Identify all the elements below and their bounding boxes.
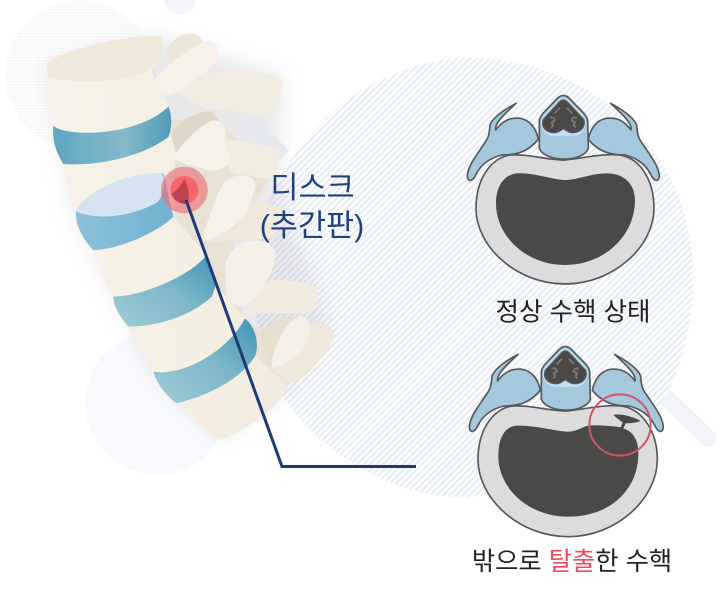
spinal canal: [539, 95, 588, 159]
target inner ring: [170, 176, 198, 204]
vertebra 1 top face: [47, 36, 163, 81]
spine shadow: [47, 37, 330, 440]
vertebral bodies: [47, 36, 288, 440]
background: hatched circle: [254, 58, 693, 497]
process A transverse: [177, 72, 282, 114]
label: disc: [260, 171, 364, 243]
herniated nucleus: [498, 415, 641, 517]
disc 2 top face: [76, 173, 164, 216]
right wing: [588, 103, 659, 180]
right wing: [592, 354, 663, 431]
process E back: [260, 317, 307, 367]
diagram: normal nucleus: [467, 95, 659, 284]
background: diagonal band: [645, 377, 708, 438]
herniation wedge: [172, 178, 189, 204]
caption: normal: 정상 수핵 상태: [496, 298, 650, 326]
process B transverse: [223, 138, 280, 180]
disc 4: [153, 318, 257, 403]
process D facet: [225, 241, 276, 306]
diagram: herniated nucleus: [469, 346, 663, 537]
disc ring: [478, 406, 657, 537]
red highlight circle: [589, 394, 651, 456]
process underlayer: [170, 117, 297, 387]
process A facet: [152, 41, 218, 95]
spinal canal: [541, 346, 590, 410]
illustration: spine: [47, 33, 333, 440]
left wing: [467, 103, 538, 180]
process C transverse: [207, 202, 287, 242]
process E right: [270, 322, 333, 383]
label line 2: (추간판): [260, 209, 364, 243]
label line 1: 디스크: [270, 171, 355, 205]
band behind spine: [243, 117, 283, 157]
background: dotted circle: [5, 0, 155, 150]
background: top small circle: [164, 0, 196, 15]
process D transverse: [243, 280, 318, 313]
process C facet: [203, 175, 255, 242]
target marker: [161, 167, 208, 213]
disc 2 side: [76, 173, 173, 250]
leader line: [186, 200, 416, 466]
nucleus: [496, 173, 635, 265]
disc 3: [113, 255, 216, 327]
target outer ring: [161, 167, 208, 213]
left wing: [469, 354, 540, 431]
caption: herniated: 밖으로 탈출한 수핵: [472, 548, 672, 576]
background: lower-left circle: [85, 331, 229, 475]
connector: [172, 111, 218, 153]
process A back: [167, 33, 203, 67]
process E facet: [272, 317, 310, 368]
disc ring: [476, 155, 654, 284]
process B facet: [173, 121, 232, 171]
disc 1: [53, 107, 171, 164]
